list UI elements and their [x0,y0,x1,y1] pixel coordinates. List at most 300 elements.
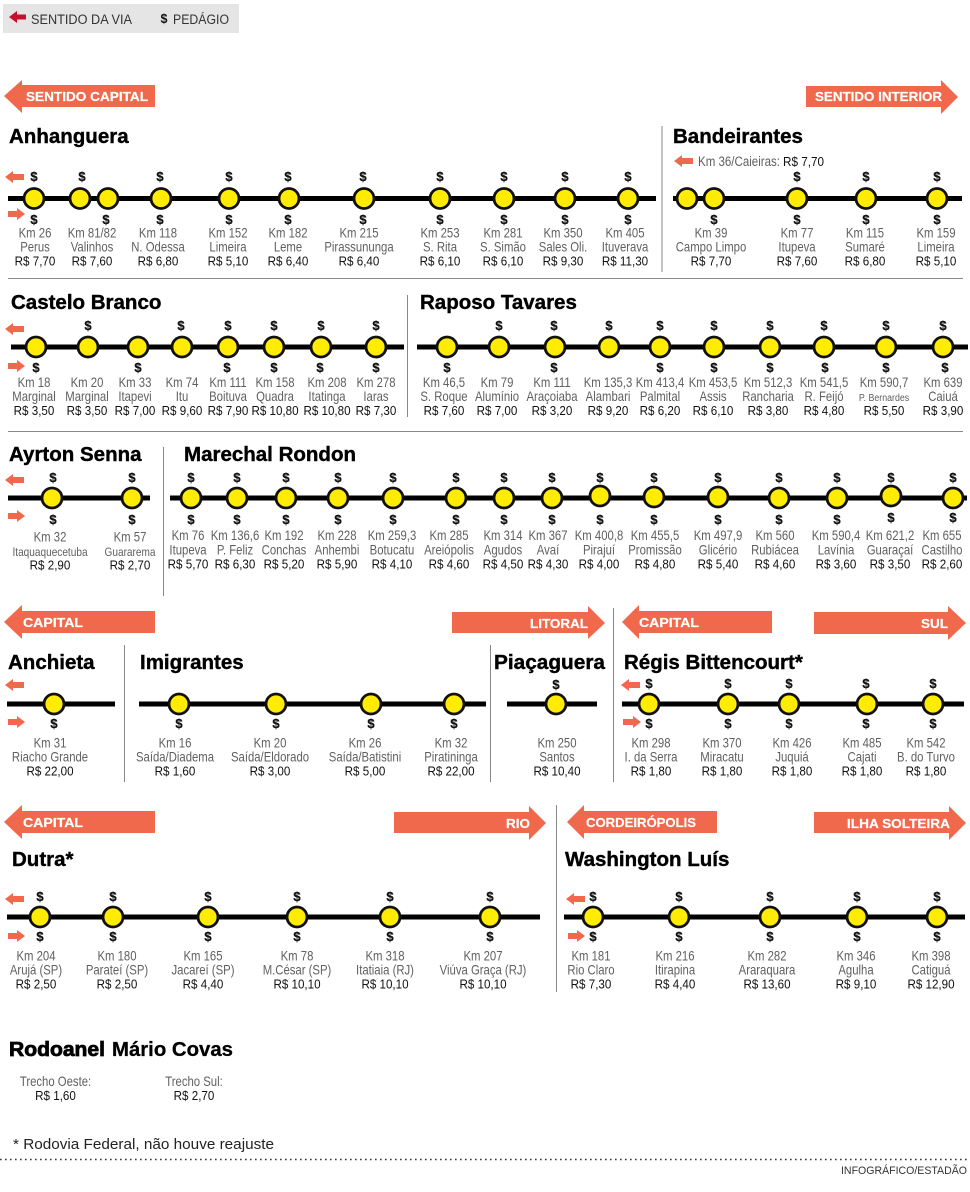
arrow: left direction [5,893,24,905]
stop: Km 39: Campo Limpo [676,240,746,255]
stop: Km 111: Km 111 [209,375,247,390]
stop: Km 314: R$ 4,50 [483,557,523,572]
stop: Km 639: $ [941,360,949,375]
stop: Km 76: $ [187,512,195,527]
stop: Km 78: Km 78 [281,949,313,964]
road: Régis Bittencourt [621,651,964,779]
stop: Km 165: R$ 4,40 [183,977,223,992]
stop: Km 590,7: Km 590,7 [860,375,908,390]
stop: Km 20 [65,318,109,418]
road line [507,702,597,706]
toll: Trecho Oeste: Trecho Oeste: [20,1074,91,1089]
stop: Km 79: R$ 7,00 [477,403,517,418]
toll: Trecho Sul: R$ 2,70 [174,1088,214,1103]
stop: Km 136,6: R$ 6,30 [215,557,255,572]
stop: Km 208 [303,318,351,418]
stop: Km 285: Km 285 [429,528,469,543]
stop: Km 216: Itirapina [655,963,695,978]
stop: Km 298 [625,676,678,779]
stop: Km 281: $ [500,212,508,227]
stop: Km 16: Saída/Diadema [136,750,214,765]
stop: Km 182: $ [284,169,292,184]
stop: Km 111 [208,318,248,418]
stop: Km 512,3: $ [766,318,774,333]
stop: Km 350: $ [561,169,569,184]
stop: Km 512,3 [742,318,794,418]
stop: Km 39 [676,188,746,269]
stop: Km 118 [131,169,185,269]
stop: Km 485: R$ 1,80 [842,764,882,779]
title: Castelo Branco [11,291,161,314]
stop: Km 541,5: R. Feijó [804,389,844,404]
stop: Km 346: Km 346 [836,949,876,964]
banner: sentido interior [806,80,958,114]
stop: Km 207: $ [486,889,494,904]
stop: Km 250 [533,677,581,779]
stop: Km 228: Km 228 [317,528,357,543]
stop: Km 228: $ [334,512,342,527]
stop: Km 216: $ [675,929,683,944]
title: Anhanguera [9,125,129,148]
stop: Km 285: R$ 4,60 [429,557,469,572]
stop: Km 159: R$ 5,10 [916,254,956,269]
stop: Km 655 [922,470,963,572]
stop: Km 159: $ [933,169,941,184]
stop: Km 31 [12,694,88,779]
stop: Km 204 [10,889,62,992]
stop: Km 398: Catiguá [911,963,951,978]
stop: Km 33 [115,337,155,418]
stop: Km 455,5: Promissão [628,543,682,558]
stop: Km 77: $ [793,169,801,184]
stop: Km 621,2: R$ 3,50 [870,557,910,572]
stop: Km 278: $ [372,318,380,333]
stop: Km 370: R$ 1,80 [702,764,742,779]
stop: Km 115: Km 115 [846,226,884,241]
stop: Km 405: $ [624,169,632,184]
stop: Km 192 [262,470,306,572]
stop: Km 298: $ [645,676,653,691]
stop: Km 350: R$ 9,30 [543,254,583,269]
stop: Km 165: Jacareí (SP) [172,963,234,978]
stop: Km 426: $ [785,676,793,691]
stop: Km 118: Km 118 [139,226,177,241]
stop: Km 367 [528,470,568,572]
stop: Km 298: I. da Serra [625,750,678,765]
banner: litoral: LITORAL [530,616,588,631]
stop: Km 590,7: R$ 5,50 [864,403,904,418]
stop: Km 541,5: R$ 4,80 [804,403,844,418]
stop: Km 136,6: P. Feliz [217,543,253,558]
arrow: left direction [5,474,24,486]
toll: Trecho Sul [165,1074,223,1103]
stop: Km 192: R$ 5,20 [264,557,304,572]
stop: Km 152 [208,169,248,269]
stop: Km 135,3 [584,318,632,418]
stop: Km 453,5: $ [710,360,718,375]
stop: Km 655: Km 655 [922,528,962,543]
stop: Km 159: Km 159 [916,226,956,241]
stop: Km 180: $ [109,889,117,904]
stop: Km 57: Km 57 [114,530,146,545]
stop: Km 46,5: R$ 7,60 [424,403,464,418]
stop: Km 405: Ituverava [602,240,648,255]
stop: Km 590,7 [859,318,909,418]
arrow: right direction [8,360,25,372]
stop: Km 81/82: $ [102,212,110,227]
stop: Km 426: $ [785,716,793,731]
stop: Km 253: $ [436,169,444,184]
stop: Km 639: $ [939,318,947,333]
stop: Km 560: R$ 4,60 [755,557,795,572]
banner: capital [4,605,155,639]
stop: Km 158: $ [270,360,278,375]
legend: SENTIDO DA VIA [31,12,132,27]
stop: Km 405: R$ 11,30 [602,254,648,269]
stop: Km 76 [168,470,208,572]
stop: Km 165: Km 165 [183,949,223,964]
stop: Km 152: Km 152 [208,226,248,241]
stop: Km 216: Km 216 [655,949,695,964]
banner: sentido interior: SENTIDO INTERIOR [815,89,943,104]
stop: Km 497,9: $ [714,512,722,527]
arrow: right direction [8,208,25,220]
banner: cordeirópolis [567,805,717,839]
stop: Km 590,4: R$ 3,60 [816,557,856,572]
stop: Km 180: R$ 2,50 [97,977,137,992]
stop: Km 181 [567,889,615,992]
stop: Km 453,5: Assis [699,389,727,404]
stop: Km 32: Piratininga [424,750,478,765]
stop: Km 512,3: $ [766,360,774,375]
stop: Km 135,3: Alambari [586,389,630,404]
stop: Km 655: Castilho [922,543,963,558]
stop: Km 453,5: R$ 6,10 [693,403,733,418]
stop: Km 77: $ [793,212,801,227]
road line [139,702,486,706]
road: Washington Luís [564,848,965,992]
stop: Km 208: Itatinga [308,389,346,404]
stop: Km 455,5: R$ 4,80 [635,557,675,572]
stop: Km 413,4: R$ 6,20 [640,403,680,418]
stop: Km 18: R$ 3,50 [14,403,54,418]
stop: Km 26: Km 26 [349,736,381,751]
stop: Km 32: $ [49,512,57,527]
stop: Km 204: $ [36,929,44,944]
stop: Km 590,4 [812,470,860,572]
stop: Km 285 [424,470,474,572]
stop: Km 350: Sales Oli. [539,240,587,255]
stop: Km 32 [12,470,88,573]
stop: Km 400,8 [575,470,623,572]
title: Mário Covas [112,1038,233,1061]
stop: Km 136,6 [211,470,259,572]
stop: Km 278: Km 278 [356,375,396,390]
stop: Km 207 [440,889,526,992]
legend: $ [161,12,168,26]
stop: Km 159: Limeira [917,240,955,255]
stop: Km 314: Km 314 [483,528,523,543]
stop: Km 78 [263,889,331,992]
stop: Km 282: $ [766,929,774,944]
stop: Km 512,3: Km 512,3 [744,375,792,390]
stop: Km 57: R$ 2,70 [110,558,150,573]
banner: capital: CAPITAL [639,615,699,630]
stop: Km 370 [700,676,744,779]
toll: Trecho Oeste: R$ 1,60 [35,1088,76,1103]
stop: Km 111: $ [550,360,558,375]
stop: Km 405: Km 405 [605,226,645,241]
stop: Km 159 [916,169,956,269]
stop: Km 453,5: $ [710,318,718,333]
stop: Km 259,3 [368,470,416,572]
stop: Km 31: R$ 22,00 [26,764,74,779]
title: Washington Luís [565,848,729,871]
stop: Km 281: R$ 6,10 [483,254,523,269]
stop: Km 158: $ [270,318,278,333]
stop: Km 621,2 [866,470,914,572]
stop: Km 228: Anhembi [315,543,359,558]
road: Marechal Rondon [168,443,967,572]
title: Rodoanel [9,1038,105,1061]
stop: Km 398 [907,889,955,992]
stop: Km 655: R$ 2,60 [922,557,962,572]
stop: Km 78: $ [293,889,301,904]
stop: Km 542: R$ 1,80 [906,764,946,779]
arrow: right direction [8,930,25,942]
arrow: right direction [568,930,585,942]
stop: Km 455,5: Km 455,5 [631,528,679,543]
stop: Km 33: $ [134,360,142,375]
stop: Km 367: Avaí [537,543,560,558]
stop: Km 20: Saída/Eldorado [231,750,309,765]
stop: Km 655: $ [949,470,957,485]
stop: Km 281 [480,169,526,269]
stop: Km 26: R$ 5,00 [345,764,385,779]
stop: Km 33: Itapevi [118,389,152,404]
stop: Km 621,2: $ [887,510,895,525]
stop: Km 542: $ [929,676,937,691]
stop: Km 285: $ [452,470,460,485]
stop: Km 497,9: Glicério [699,543,737,558]
stop: Km 118: $ [156,212,164,227]
stop: Km 46,5 [420,337,468,418]
stop: Km 215 [324,169,394,269]
stop: Km 542: B. do Turvo [897,750,955,765]
stop: Km 215: Km 215 [339,226,379,241]
stop: Km 79: $ [495,318,503,333]
stop: Km 560: Km 560 [755,528,795,543]
stop: Km 77: R$ 7,60 [777,254,817,269]
road line [7,914,540,920]
road line [7,702,115,706]
stop: Km 136,6: $ [233,512,241,527]
arrow: left direction [621,679,640,691]
stop: Km 370: Km 370 [702,736,742,751]
stop: Km 426: Juquiá [775,750,809,765]
banner: sentido capital: SENTIDO CAPITAL [26,89,148,104]
stop: Km 350: Km 350 [543,226,583,241]
banner: ilha solteira [814,806,966,840]
stop: Km 165: $ [204,889,212,904]
stop: Km 541,5: Km 541,5 [800,375,848,390]
stop: Km 426 [772,676,812,779]
stop: Km 400,8: Km 400,8 [575,528,623,543]
stop: Km 77: Km 77 [781,226,813,241]
stop: Km 118: R$ 6,80 [138,254,178,269]
road line [622,702,964,706]
stop: Km 512,3: R$ 3,80 [748,403,788,418]
stop: Km 228: R$ 5,90 [317,557,357,572]
stop: Km 136,6: Km 136,6 [211,528,259,543]
stop: Km 79: Alumínio [475,389,519,404]
stop: Km 181: Km 181 [571,949,611,964]
stop: Km 39: R$ 7,70 [691,254,731,269]
stop: Km 111: R$ 3,20 [532,403,572,418]
stop: Km 181: $ [589,889,597,904]
stop: Km 346: $ [853,929,861,944]
stop: Km 497,9: R$ 5,40 [698,557,738,572]
stop: Km 398: $ [933,929,941,944]
stop: Km 207: $ [486,929,494,944]
stop: Km 18: Marginal [12,389,56,404]
legend [3,4,239,33]
stop: Km 259,3: $ [389,512,397,527]
stop: Km 78: M.César (SP) [263,963,331,978]
stop: Km 314: $ [500,470,508,485]
stop: Km 655: $ [949,510,957,525]
stop: Km 590,7: $ [882,318,890,333]
stop: Km 560 [751,470,799,572]
stop: Km 497,9: $ [714,470,722,485]
banner: sul: SUL [921,616,948,631]
stop: Km 398: Km 398 [911,949,951,964]
legend: PEDÁGIO [173,12,229,27]
stop: Km 542 [897,676,955,779]
road line [8,196,656,201]
stop: Km 204: R$ 2,50 [16,977,56,992]
stop: Km 259,3: Km 259,3 [368,528,416,543]
stop: Km 398: R$ 12,90 [907,977,955,992]
stop: Km 215: Pirassununga [324,240,394,255]
stop: Km 400,8: $ [596,512,604,527]
stop: Km 281: $ [500,169,508,184]
banner: capital [4,805,155,839]
stop: Km 282: R$ 13,60 [743,977,791,992]
stop: Km 20: Marginal [65,389,109,404]
stop: Km 39: $ [710,212,718,227]
stop: Km 405 [602,169,648,269]
title: Ayrton Senna [9,443,142,466]
stop: Km 216 [655,889,695,992]
stop: Km 314: Agudos [484,543,522,558]
stop: Km 639: Caiuá [928,389,958,404]
stop: Km 182: R$ 6,40 [268,254,308,269]
stop: Km 57: $ [128,470,136,485]
stop: Km 32: $ [450,716,458,731]
stop: Km 590,4: $ [833,470,841,485]
stop: Km 621,2: Km 621,2 [866,528,914,543]
title: Anchieta [8,651,95,674]
stop: Km 346: $ [853,889,861,904]
stop: Km 152: $ [225,169,233,184]
stop: Km 346: Agulha [838,963,874,978]
stop: Km 228: $ [334,470,342,485]
panel: Rodoanel Mário Covas [9,1038,233,1103]
stop: Km 298: Km 298 [631,736,671,751]
road: Anhanguera [5,125,656,269]
stop: Km 115: Sumaré [845,240,885,255]
stop: Km 182: Km 182 [268,226,308,241]
stop: Km 76: Itupeva [169,543,207,558]
stop: Km 33: R$ 7,00 [115,403,155,418]
stop: Km 111: $ [223,360,231,375]
stop: Km 426: Km 426 [772,736,812,751]
road: Anchieta [5,651,115,779]
stop: Km 259,3: Botucatu [370,543,414,558]
stop: Km 318 [356,889,414,992]
stop: Km 20 [231,694,309,779]
stop: Km 32 [424,694,478,779]
stop: Km 426: R$ 1,80 [772,764,812,779]
banner: capital: CAPITAL [23,615,83,630]
note: Km 36 Caieiras [674,154,824,169]
stop: Km 57: $ [128,512,136,527]
title: Imigrantes [140,651,244,674]
stop: Km 26: Perus [20,240,50,255]
stop: Km 115 [845,169,885,269]
banner: rio: RIO [506,816,530,831]
stop: Km 370: $ [724,676,732,691]
stop: Km 318: $ [386,929,394,944]
toll: Trecho Oeste [20,1074,91,1103]
stop: Km 16 [136,694,214,779]
stop: Km 16: $ [175,716,183,731]
stop: Km 497,9: Km 497,9 [694,528,742,543]
stop: Km 74 [162,318,202,418]
stop: Km 541,5: $ [821,360,829,375]
stop: Km 152: $ [225,212,233,227]
banner: sul [814,606,966,640]
road: Dutra [5,848,540,992]
arrow: right direction [8,510,25,522]
arrow: right direction [623,716,641,728]
stop: Km 32: $ [49,470,57,485]
stop: Km 192: Km 192 [264,528,304,543]
stop: Km 158: R$ 10,80 [251,403,299,418]
stop: Km 413,4: $ [656,360,664,375]
stop: Km 370: $ [724,716,732,731]
stop: Km 413,4 [636,318,684,418]
stop: Km 39: Km 39 [695,226,727,241]
stop: Km 111: $ [224,318,232,333]
road: Ayrton Senna [5,443,156,573]
stop: Km 215: $ [359,169,367,184]
road: Castelo Branco [5,291,404,418]
stop: Km 192: $ [282,512,290,527]
stop: Km 208: R$ 10,80 [303,403,351,418]
stop: Km 590,4: Lavínia [818,543,854,558]
stop: Km 250: R$ 10,40 [533,764,581,779]
arrow: left direction [5,171,24,183]
stop: Km 57: Guararema [105,546,156,559]
stop: Km 350 [539,169,587,269]
stop: Km 204: Arujá (SP) [10,963,62,978]
stop: Km 215: R$ 6,40 [339,254,379,269]
stop: Km 367: Km 367 [528,528,568,543]
stop: Km 560: $ [775,512,783,527]
stop: Km 16: R$ 1,60 [155,764,195,779]
